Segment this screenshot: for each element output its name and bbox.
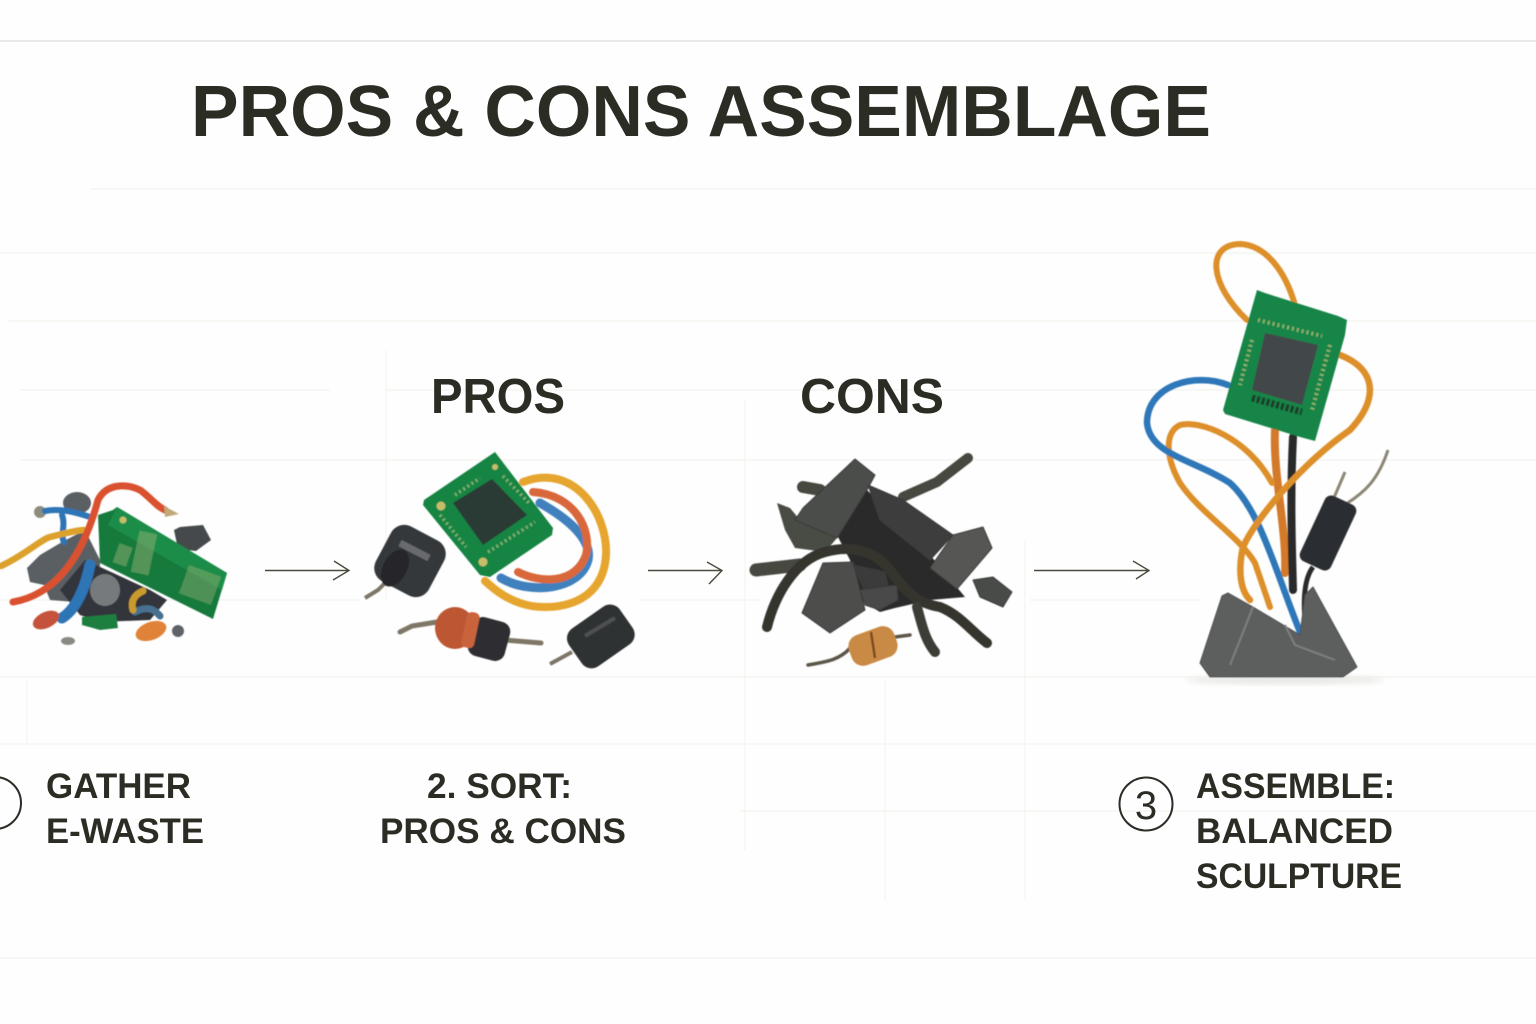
step 3 label: ASSEMBLE:: [1196, 767, 1395, 806]
orange capacitor bits: [30, 607, 169, 645]
capacitor right: [550, 600, 639, 673]
charred rocks: [795, 459, 1012, 633]
heading: cons: CONS: [800, 370, 944, 424]
step 2 label: [380, 767, 626, 851]
capacitor left: [365, 520, 451, 602]
small resistor: [808, 623, 910, 669]
arrow 2: [648, 562, 722, 584]
green pcb with chip: [423, 452, 553, 577]
rock base: [1200, 587, 1357, 677]
illustration: balanced sculpture: [1147, 244, 1388, 684]
arrow 1: [265, 561, 349, 580]
step 2 label: PROS & CONS: [380, 812, 626, 851]
step 1 number badge: [0, 777, 21, 829]
green pcb with chip: [1223, 290, 1347, 441]
illustration: e-waste pile: [1, 486, 227, 645]
illustration: cons charred pile: [756, 458, 1012, 669]
arrow 3: [1034, 561, 1149, 579]
step 2 label: 2. SORT:: [427, 767, 572, 806]
green pcb: [82, 507, 227, 630]
step 3 label: BALANCED: [1196, 812, 1393, 851]
twisted root: [767, 549, 987, 643]
step 3 label: [1196, 767, 1402, 896]
heading: pros: PROS: [431, 370, 565, 424]
gray components: [27, 492, 211, 645]
step 1 label: [46, 767, 204, 851]
illustration: pros components: [365, 452, 639, 673]
step 3 label: SCULPTURE: [1196, 857, 1402, 896]
wire tip: [164, 506, 179, 517]
yellow wire: [1, 530, 84, 566]
step 3 number badge: [1120, 778, 1172, 830]
capacitor: [1297, 450, 1388, 630]
red wire: [13, 486, 165, 602]
back rocks and branches: [756, 458, 968, 570]
blue wires: [45, 510, 160, 618]
back wires: [1147, 244, 1370, 632]
resistor: [400, 607, 541, 663]
step 1 label: E-WASTE: [46, 812, 204, 851]
title: PROS & CONS ASSEMBLAGE: [191, 72, 1211, 152]
dark centre: [838, 490, 965, 612]
coiled wires: [485, 478, 606, 607]
step 1 label: GATHER: [46, 767, 191, 806]
step 3 number badge: 3: [1135, 784, 1157, 828]
